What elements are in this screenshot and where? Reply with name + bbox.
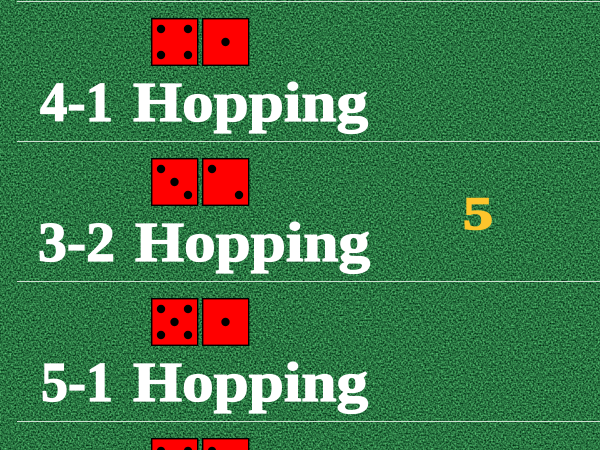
- dice: 4 and 1: [152, 19, 249, 65]
- label: 5-1 Hopping: 5-1: [41, 352, 113, 414]
- row: partial next row: [17, 421, 600, 450]
- label: 5-1 Hopping: Hopping: [133, 352, 368, 414]
- label: 3-2 Hopping: 3-2: [38, 212, 115, 274]
- label: 3-2 Hopping: Hopping: [135, 212, 370, 274]
- row: 3-2 Hopping: [17, 141, 600, 274]
- label: 4-1 Hopping: [40, 72, 368, 134]
- label: 5-1 Hopping: [41, 352, 368, 414]
- label: 4-1 Hopping: 4-1: [40, 72, 113, 134]
- dice: partially visible: [151, 438, 249, 450]
- label: 4-1 Hopping: Hopping: [133, 72, 368, 134]
- dice: 3 and 2: [152, 159, 249, 205]
- dice: 5 and 1: [152, 299, 249, 345]
- payout number: 5: [463, 188, 493, 240]
- label: 3-2 Hopping: [38, 212, 370, 274]
- row: 5-1 Hopping: [17, 281, 600, 414]
- row: 4-1 Hopping: [17, 1, 600, 134]
